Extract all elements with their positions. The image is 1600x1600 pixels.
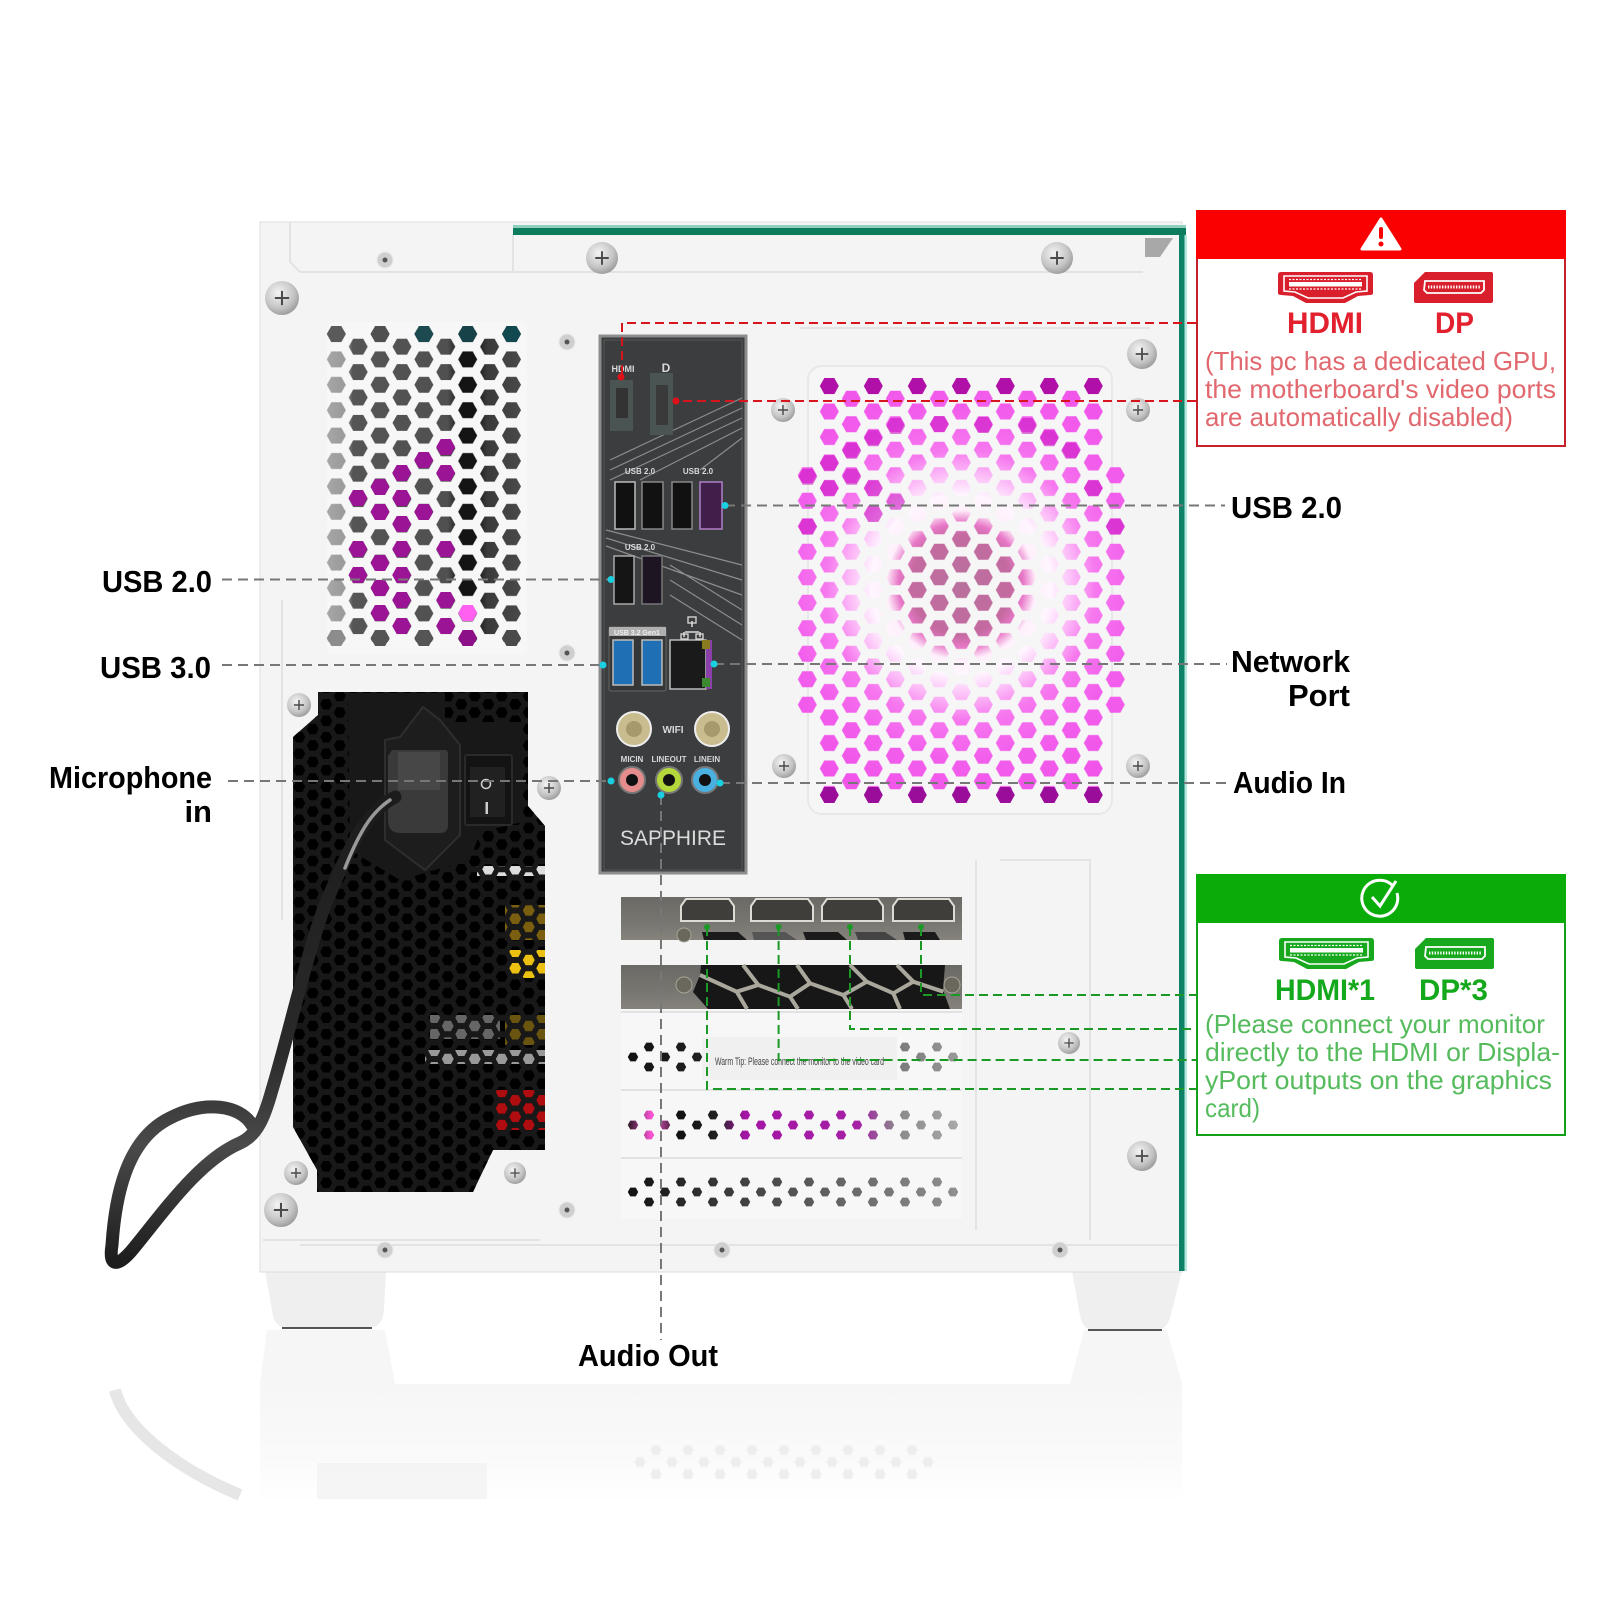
dark openings below ports <box>702 932 940 940</box>
power switch <box>465 755 512 825</box>
icon: HDMI connector red <box>1278 272 1373 303</box>
label: Audio Out: Audio Out <box>578 1338 718 1373</box>
heading: DP*3 green: DP*3 <box>1419 974 1488 1007</box>
text: green note: yPort outputs on the graphics <box>1205 1065 1552 1095</box>
product: PC case rear view <box>111 222 1187 1504</box>
icon: DP connector green <box>1415 938 1494 969</box>
power socket and plug <box>385 707 460 870</box>
text: green note: directly to the HDMI or Displa- <box>1205 1037 1560 1067</box>
label: USB 2.0 right: USB 2.0 <box>1231 490 1342 525</box>
warm tip sticker <box>702 1037 897 1080</box>
icon: HDMI connector green <box>1279 938 1374 969</box>
graphics card mesh <box>676 928 960 1009</box>
heading: HDMI*1 green: HDMI*1 <box>1275 974 1375 1007</box>
text: red note <box>1205 346 1556 432</box>
heading: DP red: DP <box>1435 307 1474 340</box>
label: Network Port: Network <box>1231 644 1351 679</box>
Wi-Fi antenna connectors <box>617 712 729 746</box>
label: Microphone in: in <box>184 794 212 829</box>
case back panel <box>260 222 1182 1272</box>
label: Microphone in: Microphone <box>49 760 212 795</box>
reflection of the case <box>115 1330 1182 1504</box>
USB 3.0 ports: USB 3.2 Gen1 <box>614 630 660 637</box>
USB 3.0 ports <box>609 627 666 691</box>
text: red note: (This pc has a dedicated GPU, <box>1205 346 1556 376</box>
Wi-Fi antenna connectors: WIFI <box>662 725 684 736</box>
leader lines: grey port callouts <box>222 506 1232 1340</box>
icon: warning triangle <box>1362 219 1400 249</box>
upper-left power supply vent <box>325 322 527 654</box>
graphics card HDMI and DP ports <box>681 899 954 921</box>
audio jacks <box>619 755 720 793</box>
warm tip sticker: Warm Tip: Please connect the monitor to the video card <box>715 1056 884 1068</box>
port marker dots <box>600 502 728 798</box>
rear fan grill with pink light <box>790 360 1130 820</box>
audio jacks: LINEOUT <box>651 755 687 764</box>
text: green note <box>1205 1009 1560 1123</box>
icon: check mark <box>1362 880 1398 916</box>
slot covers with vents <box>621 1012 962 1207</box>
decorative lines on shield <box>606 398 742 640</box>
graphics card brackets <box>621 897 962 1219</box>
leader lines: red motherboard video ports <box>618 323 1196 404</box>
power cable <box>111 797 395 1262</box>
label: Microphone in <box>49 760 212 829</box>
label: Network Port <box>1231 644 1351 713</box>
case feet <box>265 1271 1182 1330</box>
USB 2.0 ports: USB 2.0 <box>625 543 656 552</box>
power supply with socket, switch and cable <box>293 692 545 1192</box>
network port <box>670 617 712 689</box>
glass side edge in green <box>513 225 1187 1271</box>
USB 2.0 ports <box>614 467 722 604</box>
text: red note: the motherboard's video ports <box>1205 374 1556 404</box>
panel: red warning, motherboard ports disabled <box>1196 210 1566 446</box>
motherboard I/O shield <box>600 336 746 873</box>
label: Audio In: Audio In <box>1233 765 1346 800</box>
heading: HDMI red: HDMI <box>1287 307 1363 340</box>
USB 2.0 ports: USB 2.0 <box>683 467 714 476</box>
SAPPHIRE logo: SAPPHIRE <box>620 827 726 850</box>
HDMI and DP motherboard ports: HDMI <box>612 364 634 374</box>
screws <box>264 242 1157 1258</box>
label: USB 3.0: USB 3.0 <box>100 650 211 685</box>
audio jacks: MICIN <box>621 755 644 764</box>
panel: green, graphics card ports to use <box>1196 874 1566 1135</box>
text: red note: are automatically disabled) <box>1205 402 1513 432</box>
HDMI and DP motherboard ports: D <box>662 361 671 375</box>
icon: DP connector red <box>1414 272 1493 303</box>
leader lines: green graphics card ports <box>704 924 1196 1089</box>
label: Network Port: Port <box>1288 678 1350 713</box>
text: green note: card) <box>1205 1093 1260 1123</box>
HDMI and DP motherboard ports <box>610 361 673 435</box>
text: green note: (Please connect your monitor <box>1205 1009 1545 1039</box>
audio jacks: LINEIN <box>694 755 720 764</box>
label: USB 2.0 left: USB 2.0 <box>102 564 212 599</box>
USB 2.0 ports: USB 2.0 <box>625 467 656 476</box>
